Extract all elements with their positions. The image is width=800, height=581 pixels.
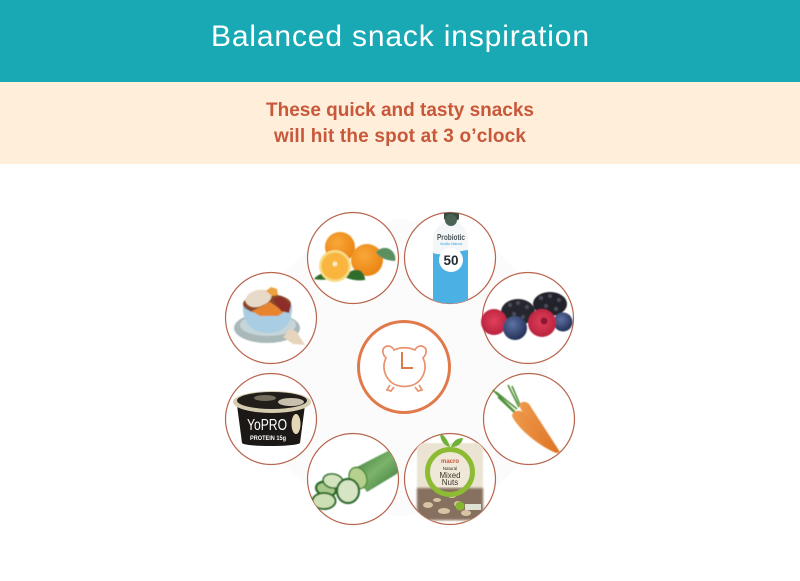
centre clock badge [358,322,450,412]
pack label: Nuts [442,478,458,487]
panel: mixed nuts [404,433,496,524]
pack label [440,460,460,485]
header banner [0,0,800,82]
icon: carrots [493,385,560,453]
pack label: Mixed [440,470,461,480]
icon: mixed berries [481,292,572,340]
product label [247,417,287,442]
subtitle text: will hit the spot at 3 o’clock [273,126,526,147]
icon: probiotic bottle: Probiotic [437,232,465,242]
panel: YoPro yoghurt [226,374,316,464]
icon: sliced cucumber [312,450,399,509]
snack wheel backdrop [252,218,548,517]
icon: yoghurt tub [233,391,311,446]
icon: probiotic bottle: Vanilla Natural [440,242,462,246]
product label: PROTEIN 15g [250,436,286,442]
icon: probiotic bottle: 50 [443,253,459,268]
pack label: Natural [443,466,457,471]
panel: probiotic drink [404,205,496,305]
panel: cucumber [308,434,399,524]
icon: nuts packet [417,433,483,521]
pack label: macro [441,459,459,465]
panel: oranges [308,212,398,304]
icon: probiotic bottle [433,205,468,305]
subtitle text: These quick and tasty snacks [266,100,534,121]
subtitle band [0,82,800,164]
product label: YoPRO [247,417,287,434]
panel: carrots [484,374,574,464]
title: Balanced snack inspiration [211,20,589,53]
panel: dried fruit bowl [226,272,316,364]
icon: oranges [314,232,395,282]
panel: berries [481,272,574,364]
icon: bowl of dried fruit [234,287,305,345]
icon: alarm clock [383,346,426,391]
